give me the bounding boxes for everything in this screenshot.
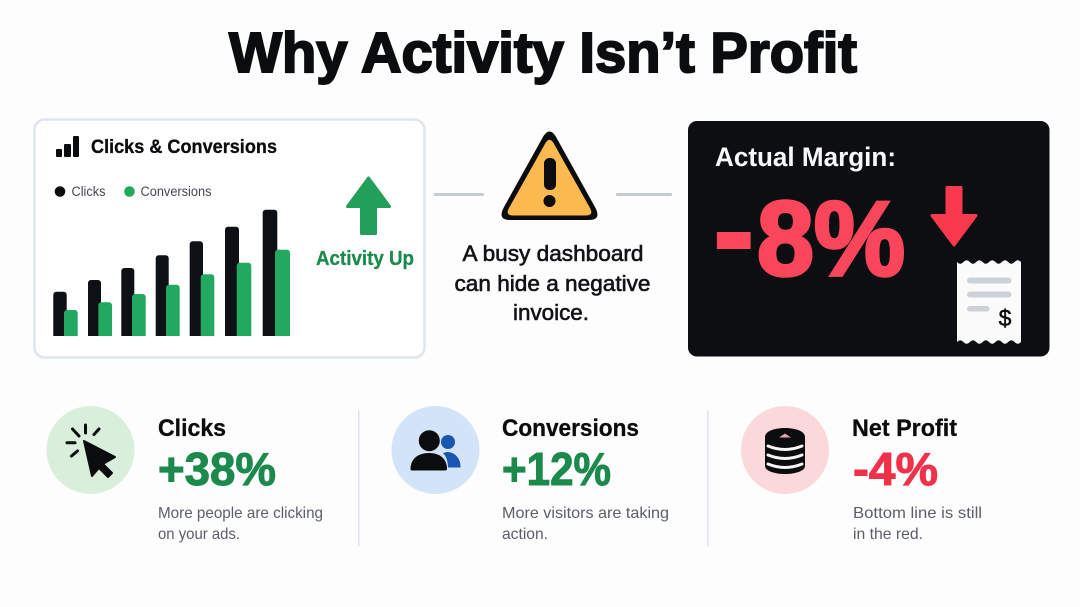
connector right	[616, 193, 672, 196]
conversions description: More visitors are taking	[502, 505, 669, 522]
legend	[55, 184, 212, 199]
margin value: -	[713, 161, 755, 300]
icon: people	[392, 406, 480, 494]
warning message: invoice.	[513, 300, 589, 325]
margin value: 8%	[757, 180, 905, 298]
legend: Conversions	[140, 184, 212, 199]
conversions description: action.	[502, 526, 548, 543]
panel: actual margin	[688, 121, 1050, 356]
stat divider one	[358, 410, 360, 546]
margin value	[713, 161, 905, 300]
icon: bar signal	[56, 136, 79, 157]
icon: red down arrow	[932, 188, 976, 245]
title: Why Activity Isn’t Profit	[229, 21, 857, 85]
conversions description	[502, 505, 669, 543]
conversions value: +12%	[502, 443, 611, 495]
clicks description: More people are clicking	[158, 505, 323, 522]
icon: receipt	[957, 260, 1021, 344]
icon: cursor click	[46, 406, 134, 494]
net profit heading: Net Profit	[852, 415, 957, 442]
icon: coin stack	[741, 406, 829, 494]
panel: clicks and conversions chart	[34, 120, 424, 358]
conversions heading: Conversions	[502, 415, 639, 442]
icon: green up arrow	[348, 178, 390, 234]
warning message	[454, 241, 650, 325]
margin label: Actual Margin:	[715, 142, 896, 172]
legend: Clicks	[72, 184, 106, 199]
chart heading: Clicks & Conversions	[91, 136, 277, 158]
clicks description	[158, 505, 323, 543]
stat: net profit	[741, 406, 982, 543]
stat: conversions	[392, 406, 669, 543]
bar chart	[53, 210, 290, 336]
warning message: A busy dashboard	[462, 241, 644, 266]
net profit value: -4%	[853, 443, 938, 495]
clicks heading: Clicks	[158, 415, 226, 442]
activity up label: Activity Up	[316, 248, 414, 270]
icon: receipt: $	[999, 305, 1012, 331]
net profit description: in the red.	[853, 526, 923, 543]
warning message: can hide a negative	[454, 271, 650, 296]
clicks description: on your ads.	[158, 526, 240, 543]
net profit description	[853, 505, 982, 543]
clicks value: +38%	[158, 443, 276, 495]
stat divider two	[707, 410, 708, 546]
net profit description: Bottom line is still	[853, 505, 982, 522]
icon: warning triangle	[502, 132, 597, 220]
connector left	[434, 193, 484, 196]
stat: clicks	[46, 406, 323, 543]
